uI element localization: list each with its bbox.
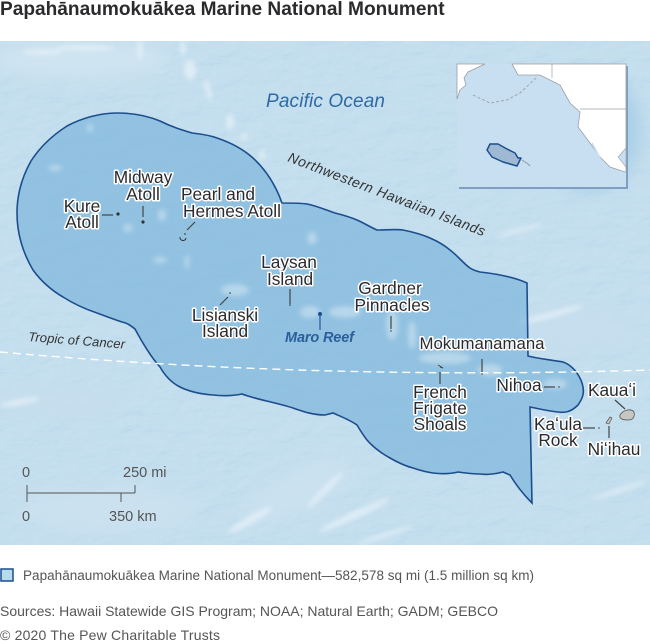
label: Laysan Island: Laysan [261,252,317,272]
inset land [457,64,626,172]
label: Midway Atoll [114,167,173,224]
label: Maro Reef [285,312,356,342]
label: Pearl and Hermes Atoll: Pearl and [181,184,255,204]
sources: Sources: Hawaii Statewide GIS Program; NOAA; Natural Earth; GADM; GEBCO [0,603,498,619]
scale bar [22,465,167,525]
label: Kaua'i [588,380,636,420]
scale bar: 0 [22,509,30,525]
label: Kure Atoll [64,198,120,230]
label: Kure Atoll: Kure [64,196,100,216]
label: Gardner Pinnacles: Gardner [358,278,422,298]
label: Ka'ula Rock: Kaʻula [534,414,582,434]
label: Lisianski Island [192,292,258,341]
legend: Papahānaumokuākea Marine National Monument—582,578 sq mi (1.5 million sq km) [23,568,534,583]
label: Laysan Island: Island [267,269,313,289]
inset monument [487,144,521,166]
label: French Frigate Shoals: Shoals [414,414,467,434]
scale bar: 0 [22,465,30,481]
label: Midway Atoll: Midway [114,167,173,187]
label: Gardner Pinnacles: Pinnacles [355,295,430,315]
label: Nihoa [496,376,560,392]
label: Pacific Ocean: Pacific Ocean [266,91,385,112]
label: Ni'ihau: Niʻihau [588,439,640,459]
label: French Frigate Shoals [413,365,467,434]
legend swatch [1,569,13,581]
seamounts [48,124,567,389]
label: Ni'ihau [588,417,640,459]
label: Gardner Pinnacles [355,278,430,332]
map [0,40,650,546]
label: Lisianski Island: Island [202,321,248,341]
label: Maro Reef: Maro Reef [285,330,356,346]
label: Kure Atoll: Atoll [65,212,99,232]
label: Mokumanamana [420,334,545,375]
label: Nihoa: Nihoa [496,375,542,395]
scale bar: 350 km [109,509,157,525]
label: Ka'ula Rock: Rock [538,430,578,450]
label: Northwestern Hawaiian Islands: Northwestern Hawaiian Islands [286,149,488,239]
ocean ridges [0,40,649,546]
label: Pearl and Hermes Atoll [180,184,281,241]
scale bar: 250 mi [123,465,167,481]
monument boundary [17,113,583,503]
label: French Frigate Shoals: French [413,382,467,402]
label: Laysan Island [261,252,317,306]
label: Midway Atoll: Atoll [126,184,160,204]
label: Tropic of Cancer: Tropic of Cancer [28,329,126,352]
label: Lisianski Island: Lisianski [192,305,258,325]
label: Mokumanamana: Mokumanamana [420,334,545,353]
tropic of cancer line [0,352,650,373]
inset locator map [457,64,628,189]
label: Kaua'i: Kauaʻi [588,380,636,400]
label: Pearl and Hermes Atoll: Hermes Atoll [183,201,281,221]
label: French Frigate Shoals: Frigate [413,398,467,418]
label: Ka'ula Rock [534,416,600,448]
